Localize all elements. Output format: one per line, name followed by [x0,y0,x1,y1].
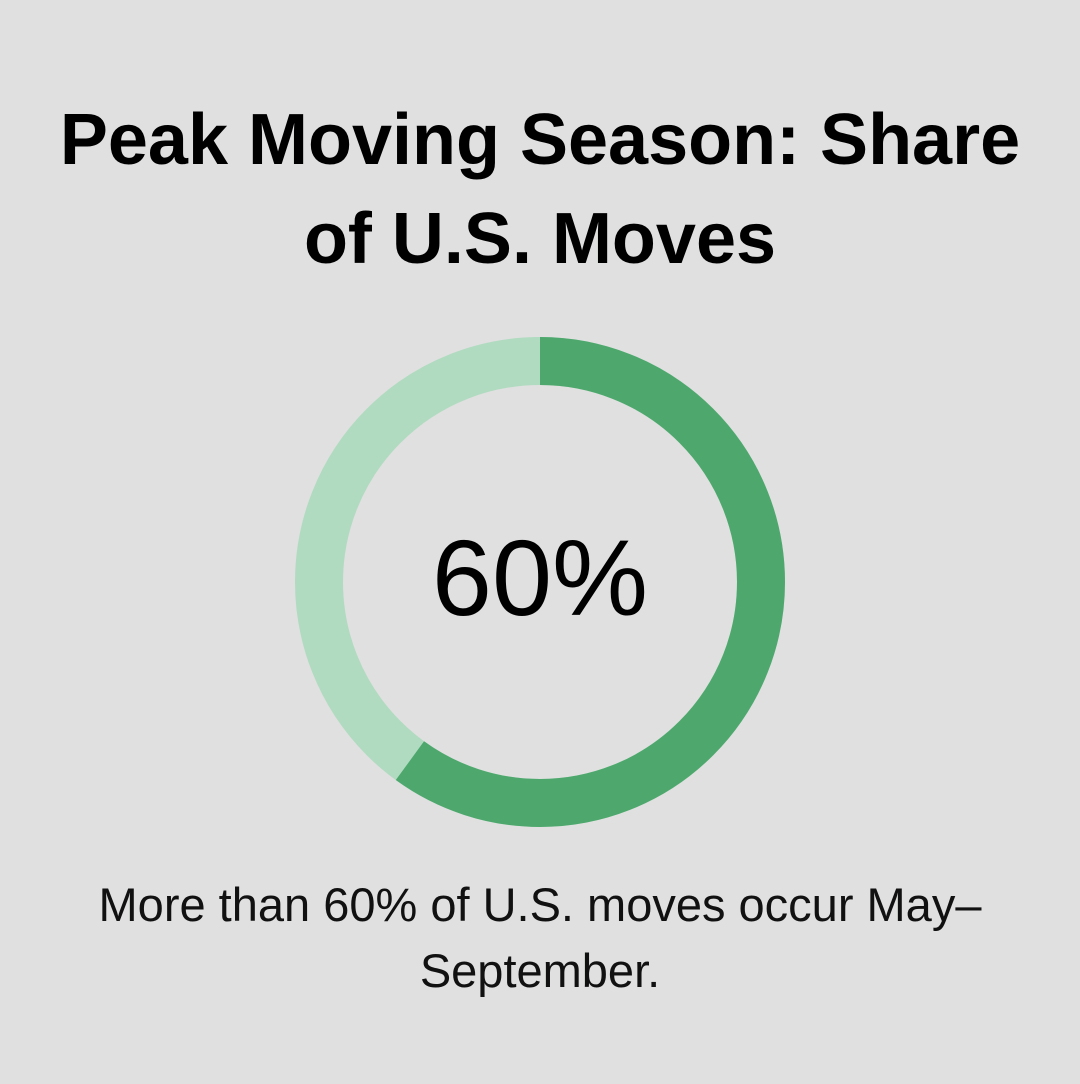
title: of U.S. Moves [304,199,776,279]
title [60,100,1020,279]
donut track: remaining share [319,361,761,803]
center value: 60% [432,517,648,638]
title: Peak Moving Season: Share [60,100,1020,180]
donut segment: 60% [319,361,761,803]
caption [99,878,982,997]
caption: September. [420,944,660,997]
caption: More than 60% of U.S. moves occur May– [99,878,981,931]
